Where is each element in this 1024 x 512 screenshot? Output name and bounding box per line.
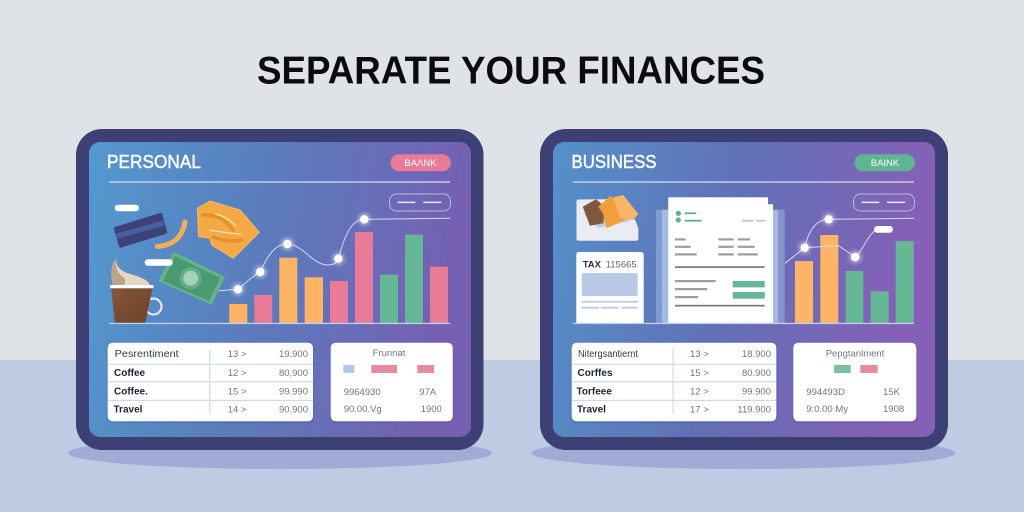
bank badge [854,154,915,171]
trend line: personal [219,213,450,295]
summary card: personal: Frunnat [373,348,406,359]
table: personal: 12 > [228,368,247,379]
table: personal: Coffee. [114,386,148,398]
table: personal: Travel [114,404,143,416]
summary card: business: 994493D [806,387,845,398]
table: business: 17 > [690,404,709,416]
legend chip [854,194,914,211]
label pill [115,205,139,211]
bar chart: business [795,235,914,323]
legend chip [390,194,450,211]
invoice document [656,197,785,323]
table: personal: Pesrentiment [115,349,179,360]
heading: business: BUSINESS [572,152,656,172]
table: personal: 19.900 [279,349,308,360]
table: business: 80.900 [742,368,771,379]
table: business: 119.900 [737,404,771,416]
panel: business [532,129,956,469]
icon: orange ticket [197,201,259,258]
table: personal: 13 > [228,349,247,360]
table: personal: 99.990 [279,386,308,398]
summary card: business: 1908 [883,404,904,415]
summary card: personal: 90.00.Vg [344,404,382,415]
table: business: 18.900 [742,349,771,360]
table: personal: 15 > [228,386,247,398]
background wall [0,0,1024,360]
bank badge: BAΛNK [404,158,437,169]
table: business: Travel [577,404,606,416]
tax card [576,252,644,323]
panel shadow [532,437,956,469]
summary card: personal: 97A [419,387,437,398]
title: SEPARATE YOUR FINANCES [257,50,765,92]
icon: receipts photo [576,195,638,241]
bank badge [390,154,451,171]
summary card: personal: 9964930 [344,387,381,398]
table: business: Nitergsantiernt [578,349,638,360]
tax card: TAX [583,260,602,270]
background floor [0,360,1024,512]
bank badge: BAINK [871,158,900,169]
table: business [572,343,776,421]
icon: coffee cup [110,259,162,323]
heading: personal: PERSONAL [107,152,201,172]
panel: personal [68,129,492,469]
icon: credit card [115,214,166,246]
table: business: Torfeee [576,386,612,398]
label pill [145,259,173,266]
table: personal: Coffee [114,368,146,379]
panel frame [76,129,484,450]
tax card: 115665 [606,260,637,270]
table: personal [108,343,313,421]
icon: banknote [158,252,225,305]
panel screen [553,142,935,437]
summary card: business: 9:0.00 My [806,404,848,415]
summary card: personal: 1900 [421,404,442,415]
table: business: 13 > [690,349,709,360]
table: business: 99.900 [742,386,771,398]
panel frame [540,129,948,450]
table: business: 15 > [690,368,709,379]
orange curve [157,222,185,246]
panel shadow [68,437,492,469]
table: business: Corffes [578,368,613,379]
table: personal: 80,900 [279,368,308,379]
summary card: business [793,343,916,421]
trend line: business [785,213,914,263]
table: personal: 90.900 [279,404,308,416]
panel screen [89,142,471,437]
summary card: personal [331,343,453,421]
table: business: 12 > [690,386,709,398]
summary card: business: 15K [883,387,901,398]
table: personal: 14 > [228,404,247,416]
summary card: business: Pepgtanlment [826,348,885,360]
bar chart: personal [229,232,448,323]
